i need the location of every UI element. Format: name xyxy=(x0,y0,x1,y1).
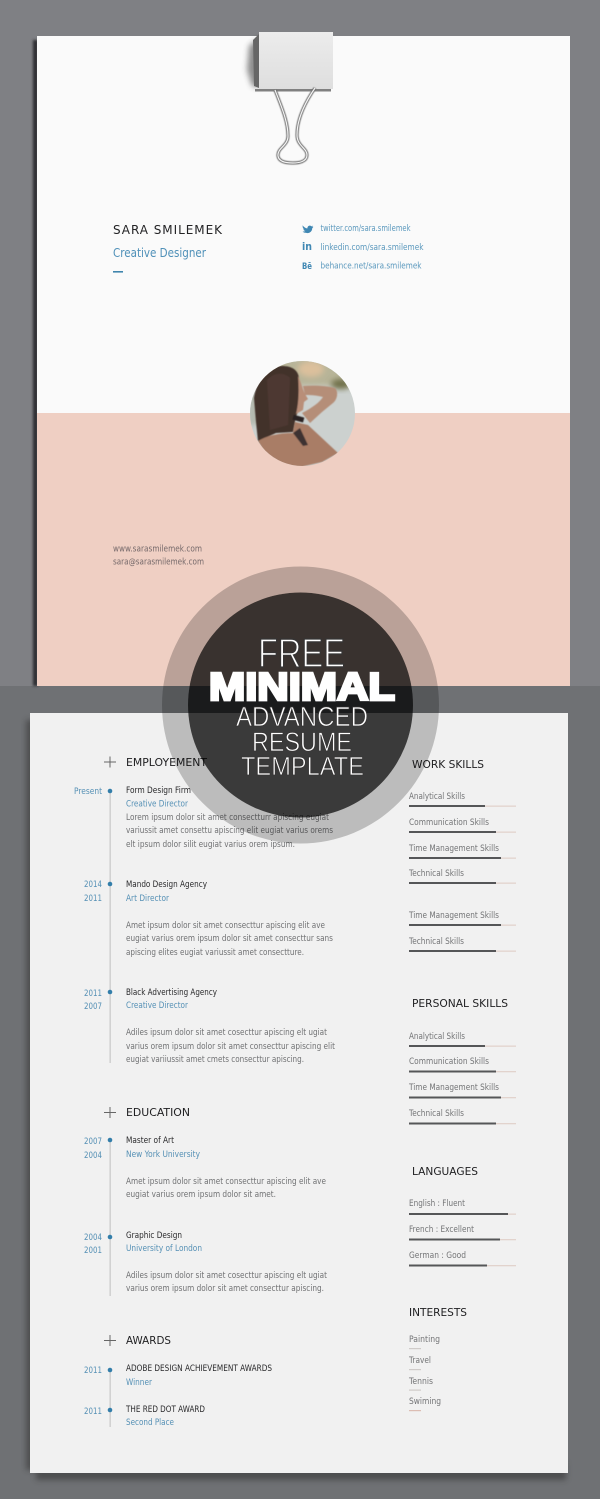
language bars: French : Excellent xyxy=(409,1225,474,1235)
entry: graphic design: Adiles ipsum dolor sit amet cosecttur apiscing elt ugiat xyxy=(126,1271,327,1281)
icon: linkedin: in xyxy=(302,240,312,253)
icon: plus xyxy=(104,1107,116,1118)
skill bars: Time Management Skills xyxy=(408,844,499,854)
twitter url: twitter.com/sara.smilemek xyxy=(320,224,411,234)
raised arm xyxy=(302,386,337,423)
timeline xyxy=(108,789,112,1063)
entry: graphic design xyxy=(126,1231,327,1294)
dates xyxy=(84,1137,102,1256)
panel: bottom resume sheet xyxy=(26,713,568,1480)
badge text: advanced: ADVANCED xyxy=(236,701,368,732)
panel: top resume sheet xyxy=(33,32,570,686)
section: work skills xyxy=(408,758,516,952)
dates: 2004 xyxy=(84,1233,102,1243)
entry: graphic design: varius orem ipsum dolor sit amet consecttur apiscing. xyxy=(126,1284,324,1294)
language bars xyxy=(409,1199,516,1266)
skill bars xyxy=(408,792,516,952)
job: black advertising agency: Creative Director xyxy=(126,1001,188,1011)
entry: master of art: Amet ipsum dolor sit amet consecttur apiscing elit ave xyxy=(126,1177,326,1187)
timeline xyxy=(108,1138,112,1296)
contact details: sara@sarasmilemek.com xyxy=(113,558,204,568)
dates: 2011 xyxy=(84,894,102,904)
icon: plus xyxy=(104,756,116,768)
job: form design firm xyxy=(126,786,333,850)
name: SARA SMILEMEK xyxy=(113,223,223,237)
icon: behance: Bē xyxy=(302,262,312,272)
job: mando design agency: Art Director xyxy=(126,894,169,904)
award: red dot: Second Place xyxy=(126,1418,174,1428)
hair xyxy=(254,366,302,441)
dates: 2011 xyxy=(84,989,102,999)
job: black advertising agency: Adiles ipsum dolor sit amet cosecttur apiscing elt ugiat xyxy=(126,1028,327,1038)
heading: WORK SKILLS xyxy=(412,758,484,771)
dates: 2007 xyxy=(84,1137,102,1147)
job: form design firm: Lorem ipsum dolor sit amet consectturr apiscing eugiat xyxy=(126,813,329,823)
icon: plus xyxy=(104,1335,116,1346)
interests list: Swiming xyxy=(409,1397,441,1407)
job: mando design agency: eugiat varius orem ipsum dolor sit amet consecttur sans xyxy=(126,934,333,944)
skill bars: Communication Skills xyxy=(409,1057,489,1067)
job: form design firm: elt ipsum dolor silit eugiat varius orem ipsum. xyxy=(126,840,295,850)
entry: master of art xyxy=(126,1136,326,1200)
job: mando design agency xyxy=(126,880,333,958)
section: interests xyxy=(408,1306,467,1411)
skill bars: Technical Skills xyxy=(408,937,464,947)
section: education xyxy=(84,1106,327,1296)
heading: INTERESTS xyxy=(409,1306,467,1319)
pink lower block xyxy=(37,413,570,686)
behance url: behance.net/sara.smilemek xyxy=(320,262,422,272)
dates: 2004 xyxy=(84,1151,102,1161)
entry: graphic design: Graphic Design xyxy=(126,1231,182,1241)
contact details xyxy=(113,544,204,568)
award: adobe: Winner xyxy=(126,1378,152,1388)
interests list: Tennis xyxy=(408,1377,433,1387)
dates xyxy=(84,1366,102,1417)
entry: master of art: eugiat varius orem ipsum dolor sit amet. xyxy=(126,1190,276,1200)
interests list xyxy=(408,1335,441,1411)
language bars: English : Fluent xyxy=(409,1199,465,1209)
section: languages xyxy=(409,1165,516,1266)
section: personal skills xyxy=(408,997,516,1124)
badge text: free: FREE xyxy=(258,630,345,676)
skill bars: Analytical Skills xyxy=(409,792,465,802)
shoulder and lower arm xyxy=(258,422,338,468)
job: black advertising agency: eugiat variiussit amet cmets consecttur apiscing. xyxy=(126,1055,304,1065)
entry: master of art: Master of Art xyxy=(126,1136,174,1146)
job: mando design agency: Amet ipsum dolor sit amet consecttur apiscing elit ave xyxy=(126,921,325,931)
dates: 2011 xyxy=(84,1366,102,1376)
inner dark circle xyxy=(188,592,413,818)
dates: 2011 xyxy=(84,1407,102,1417)
bracelet xyxy=(292,415,304,422)
job title: Creative Designer xyxy=(113,246,206,260)
interests list: Travel xyxy=(408,1356,431,1366)
job: form design firm: variussit amet consettu apiscing elit eugiat varius orems xyxy=(126,826,333,836)
face xyxy=(296,376,308,414)
badge text: template: TEMPLATE xyxy=(241,751,364,781)
badge: free minimal advanced resume template xyxy=(162,566,439,844)
linkedin url: linkedin.com/sara.smilemek xyxy=(320,243,424,253)
contact details: www.sarasmilemek.com xyxy=(113,544,202,554)
accent dash xyxy=(113,271,123,273)
job: form design firm: Creative Director xyxy=(126,800,188,810)
skill bars: Communication Skills xyxy=(409,818,489,828)
skill bars: Time Management Skills xyxy=(408,911,499,921)
job: form design firm: Form Design Firm xyxy=(126,786,191,796)
award: red dot xyxy=(125,1405,205,1428)
heading: EDUCATION xyxy=(126,1106,190,1119)
interests list: Painting xyxy=(409,1335,440,1345)
outer translucent ring xyxy=(162,566,439,844)
entry: graphic design: University of London xyxy=(126,1244,202,1254)
award: red dot: THE RED DOT AWARD xyxy=(125,1405,205,1415)
heading: AWARDS xyxy=(126,1334,171,1347)
language bars: German : Good xyxy=(409,1251,466,1261)
skill bars: Technical Skills xyxy=(408,869,464,879)
dates: 2014 xyxy=(84,880,102,890)
job: black advertising agency: varius orem ipsum dolor sit amet consecttur apiscing elit xyxy=(126,1042,335,1052)
skill bars: Time Management Skills xyxy=(408,1083,499,1093)
icon: binder clip xyxy=(247,32,333,163)
social links xyxy=(302,224,424,272)
heading: LANGUAGES xyxy=(412,1165,478,1178)
profile photo xyxy=(248,358,357,468)
dates: 2007 xyxy=(84,1002,102,1012)
skill bars: Analytical Skills xyxy=(409,1032,465,1042)
section: awards xyxy=(84,1334,272,1428)
dates: 2001 xyxy=(84,1246,102,1256)
job: black advertising agency: Black Advertising Agency xyxy=(126,988,218,998)
entry: master of art: New York University xyxy=(126,1150,201,1160)
heading: EMPLOYEMENT xyxy=(126,756,207,769)
award: adobe xyxy=(126,1364,272,1388)
section: employment xyxy=(74,756,335,1065)
job: black advertising agency xyxy=(126,988,335,1065)
award: adobe: ADOBE DESIGN ACHIEVEMENT AWARDS xyxy=(126,1364,272,1374)
dates xyxy=(74,787,102,1012)
top strap xyxy=(293,428,308,446)
skill bars: Technical Skills xyxy=(408,1109,464,1119)
job: mando design agency: apiscing elites eugiat variussit amet consectture. xyxy=(126,948,304,958)
badge text: minimal: MINIMAL xyxy=(209,666,395,709)
timeline xyxy=(108,1368,112,1427)
job: mando design agency: Mando Design Agency xyxy=(126,880,208,890)
dates: Present xyxy=(74,787,102,797)
heading: PERSONAL SKILLS xyxy=(412,997,508,1010)
icon: twitter xyxy=(303,225,313,233)
skill bars xyxy=(408,1032,516,1124)
badge text: resume: RESUME xyxy=(252,727,352,757)
